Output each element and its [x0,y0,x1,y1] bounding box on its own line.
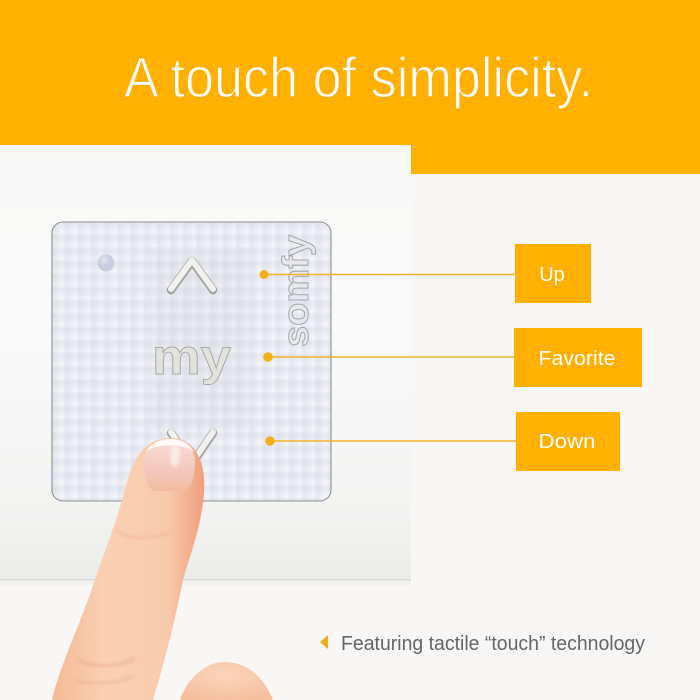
header band [0,0,700,174]
thumb [180,662,273,700]
label: favorite [514,328,642,387]
fingernail [144,439,195,491]
icon: my button: my [152,329,231,385]
label: down: Down [538,431,596,453]
icon: up chevron [171,260,213,290]
connector: down [265,436,516,446]
icon: down chevron [171,432,213,464]
label: up [515,244,591,303]
panel: wall switch plate [0,145,411,585]
label: favorite: Favorite [538,348,616,370]
icon: footnote arrow [320,635,328,649]
finger [52,438,204,700]
icon: somfy logo: somfy [275,235,316,347]
connector: favorite [263,352,514,362]
connector: up [260,270,515,279]
panel: keypad [48,218,335,505]
label: down [516,412,620,471]
footnote: Featuring tactile “touch” technology [341,633,645,655]
title: A touch of simplicity. [124,46,593,110]
icon: status light [98,254,114,272]
label: up: Up [539,264,565,286]
